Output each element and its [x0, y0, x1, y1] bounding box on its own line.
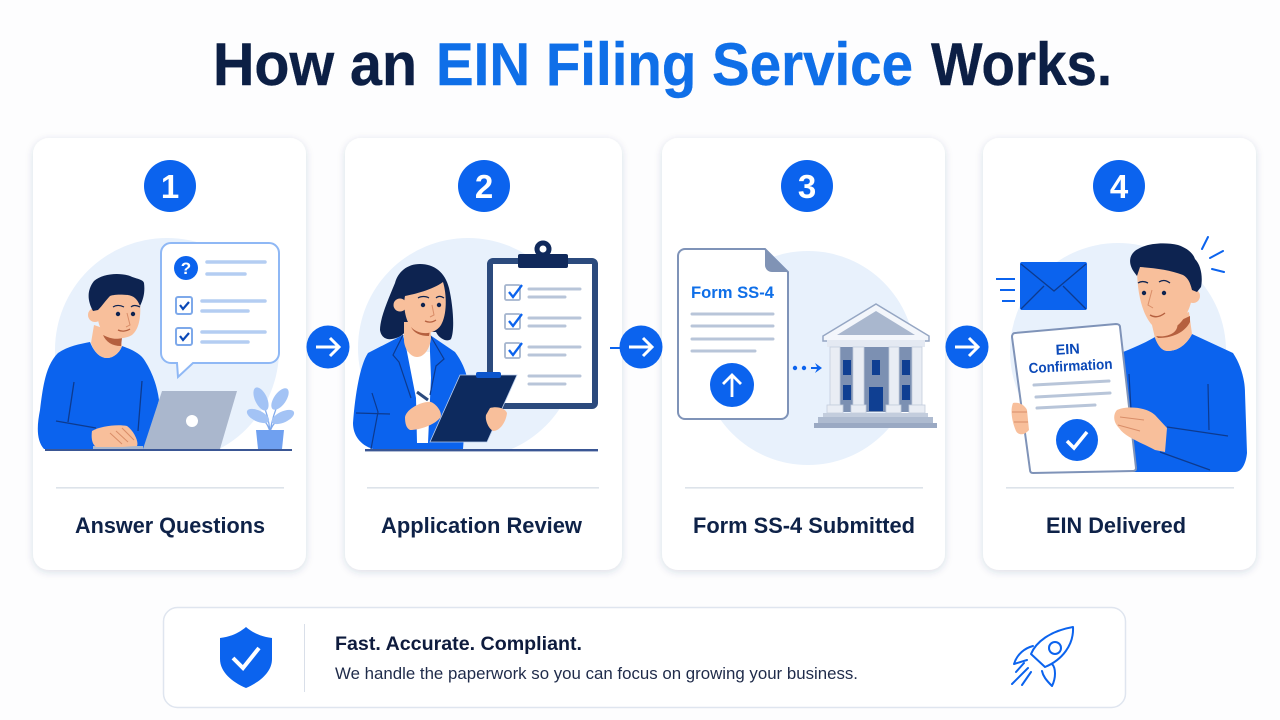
illustration: form to government building: [678, 249, 937, 465]
confirmation document: Confirmation: [1028, 357, 1113, 377]
panel: step 3 form submitted: [662, 138, 945, 570]
banner text: We handle the paperwork so you can focus on growing your business.: [335, 664, 858, 683]
step number 4: 4: [1110, 168, 1129, 205]
step number 2: [458, 160, 510, 212]
celebration rays: [1202, 237, 1224, 272]
form document: [678, 249, 788, 419]
arrow: step 3 to 4: [946, 326, 988, 368]
icon: rocket: [1012, 627, 1073, 686]
laptop: [143, 391, 237, 449]
desk line: [45, 449, 292, 451]
dotted arrow: [793, 363, 822, 373]
arrow: step 1 to 2: [306, 326, 350, 368]
divider: [367, 487, 599, 489]
panel: step 4 ein delivered: [983, 138, 1256, 570]
title: Works.: [931, 31, 1112, 98]
step label: Application Review: [381, 513, 583, 538]
small clipboard and hands: [417, 392, 428, 400]
banner heading: Fast. Accurate. Compliant.: [335, 634, 582, 655]
divider: [685, 487, 923, 489]
step number 2: 2: [475, 168, 493, 205]
illustration: reviewer with clipboard: [353, 238, 598, 458]
arrow: step 2 to 3: [610, 326, 662, 368]
confirmation document: EIN: [1055, 341, 1080, 359]
title: How an: [213, 31, 417, 98]
speech bubble checklist: [161, 243, 279, 377]
panel: step 2 application review: [345, 138, 622, 570]
step number 1: [144, 160, 196, 212]
panel: step 1 answer questions: [33, 138, 306, 570]
step label: EIN Delivered: [1046, 513, 1186, 538]
step number 3: [781, 160, 833, 212]
title: [213, 31, 1112, 98]
envelope: [996, 262, 1087, 310]
illustration: person at laptop: [38, 238, 296, 462]
speech bubble checklist: ?: [181, 259, 191, 278]
title: EIN Filing Service: [436, 31, 913, 98]
divider: [1006, 487, 1234, 489]
step number 4: [1093, 160, 1145, 212]
icon: shield with check: [220, 627, 272, 688]
confirmation document: [1012, 324, 1136, 473]
step number 3: 3: [798, 168, 816, 205]
illustration: person with confirmation: [996, 237, 1247, 473]
step label: Answer Questions: [75, 513, 265, 538]
divider: [56, 487, 284, 489]
step number 1: 1: [161, 168, 179, 205]
person: [1123, 334, 1247, 472]
step label: Form SS-4 Submitted: [693, 513, 915, 538]
panel: bottom banner: [164, 608, 1126, 708]
form document: Form SS-4: [691, 283, 775, 302]
woman: [380, 264, 453, 340]
desk line: [365, 449, 598, 451]
person body: [38, 342, 159, 449]
government building: [814, 304, 937, 428]
hands: [1012, 403, 1029, 434]
plant: [245, 385, 296, 449]
large clipboard: [490, 243, 595, 406]
